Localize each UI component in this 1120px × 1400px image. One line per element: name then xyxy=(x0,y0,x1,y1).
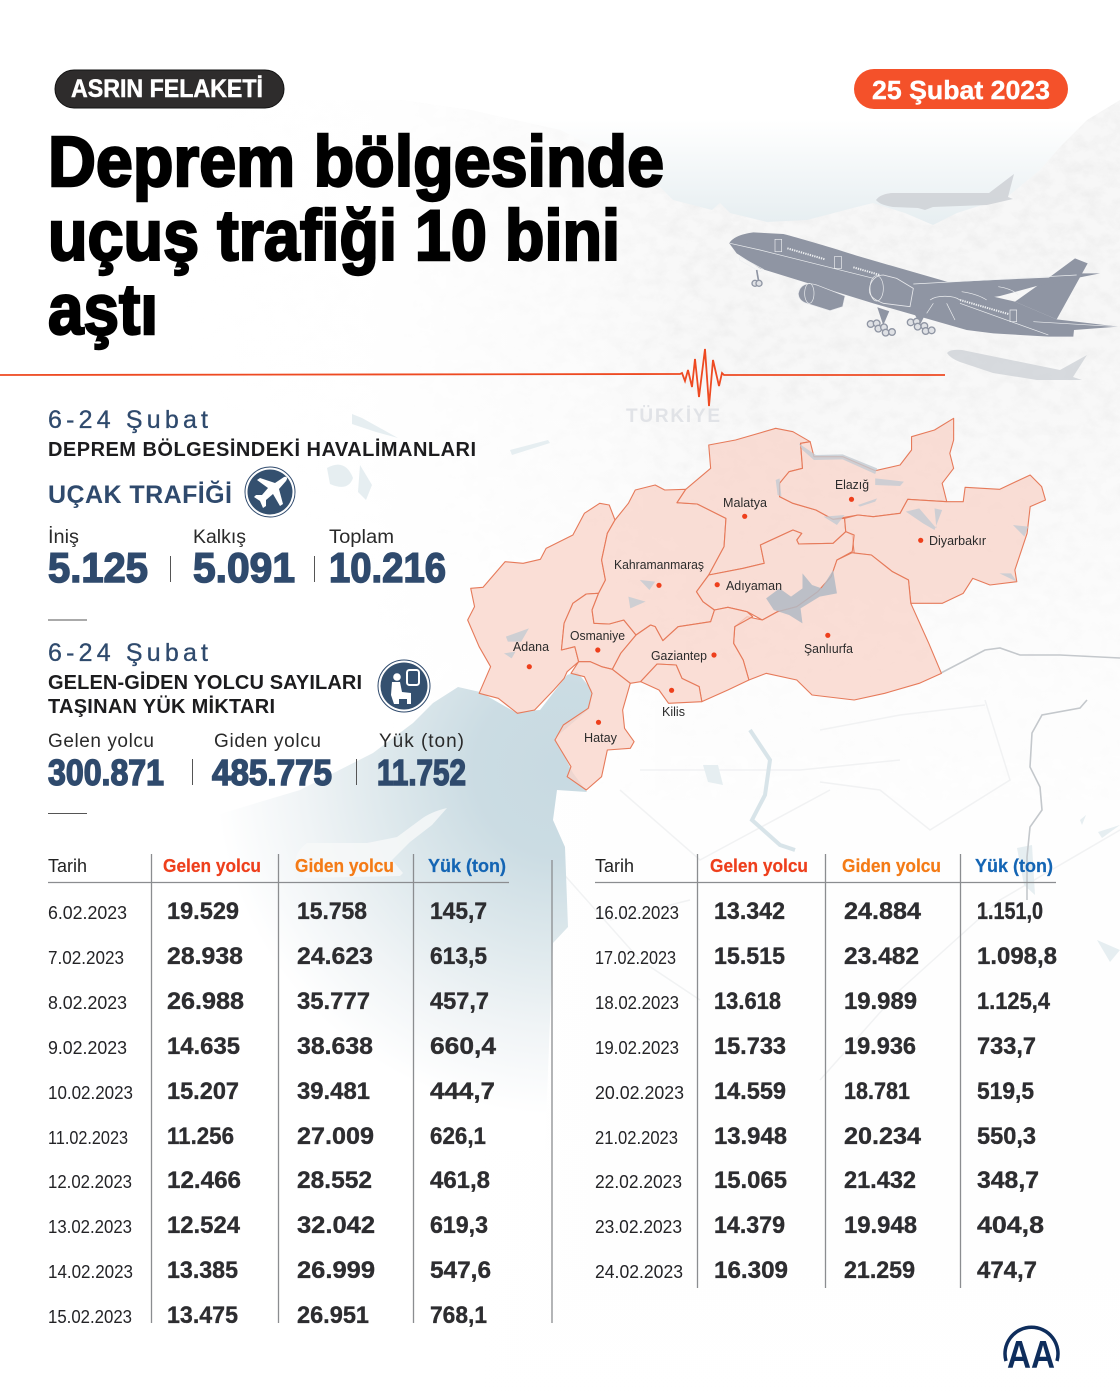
row 20.02.2023: 519,5 xyxy=(977,1078,1034,1105)
heading: aircraft traffic: UÇAK TRAFİĞİ xyxy=(48,480,232,509)
Cyprus xyxy=(295,808,447,878)
row 22.02.2023: 21.432 xyxy=(844,1167,916,1194)
provinces xyxy=(468,418,1045,790)
row 9.02.2023: 9.02.2023 xyxy=(48,1037,127,1058)
Adana: Adana xyxy=(513,639,550,654)
row 19.02.2023: 19.02.2023 xyxy=(595,1037,679,1058)
stat: arriving passengers: Gelen yolcu xyxy=(48,731,154,752)
row 15.02.2023: 13.475 xyxy=(167,1302,238,1329)
row 10.02.2023: 39.481 xyxy=(297,1078,370,1105)
stat: departing passengers xyxy=(212,731,332,793)
row 12.02.2023 xyxy=(48,1167,490,1194)
Kahramanmaras: Kahramanmaraş xyxy=(614,557,704,572)
Elazig: Elazığ xyxy=(835,477,869,492)
row 20.02.2023 xyxy=(595,1078,1034,1105)
row 13.02.2023: 12.524 xyxy=(167,1212,241,1239)
table header xyxy=(595,855,1053,876)
row 22.02.2023: 15.065 xyxy=(714,1167,787,1194)
Sanliurfa xyxy=(804,633,854,656)
Syria and Iraq borders xyxy=(941,648,1120,900)
row 7.02.2023: 28.938 xyxy=(167,943,243,970)
Gaziantep: Gaziantep xyxy=(651,648,707,663)
row 17.02.2023: 15.515 xyxy=(714,943,785,970)
stat: total: Toplam xyxy=(329,527,394,548)
row 21.02.2023: 21.02.2023 xyxy=(595,1127,678,1148)
title: uçuş trafiği 10 bini xyxy=(48,197,620,276)
row 6.02.2023: 6.02.2023 xyxy=(48,902,127,923)
row 8.02.2023: 26.988 xyxy=(167,988,244,1015)
table header: Yük (ton) xyxy=(975,856,1053,876)
subheading: DEPREM BÖLGESİNDEKİ HAVALİMANLARI xyxy=(48,438,476,461)
row 14.02.2023 xyxy=(48,1257,491,1284)
tag: Asrin Felaketi: ASRIN FELAKETİ xyxy=(71,75,263,103)
Kilis xyxy=(662,688,685,719)
row 9.02.2023: 660,4 xyxy=(430,1033,497,1060)
row 21.02.2023 xyxy=(595,1123,1036,1150)
row 14.02.2023: 26.999 xyxy=(297,1257,375,1284)
row 6.02.2023: 15.758 xyxy=(297,898,367,925)
row 16.02.2023: 16.02.2023 xyxy=(595,902,679,923)
row 21.02.2023: 20.234 xyxy=(844,1123,922,1150)
row 23.02.2023: 19.948 xyxy=(844,1212,917,1239)
row 7.02.2023: 24.623 xyxy=(297,943,373,970)
row 18.02.2023: 18.02.2023 xyxy=(595,992,679,1013)
row 11.02.2023: 27.009 xyxy=(297,1123,374,1150)
row 23.02.2023: 404,8 xyxy=(977,1212,1044,1239)
row 13.02.2023 xyxy=(48,1212,488,1239)
country label: TÜRKİYE xyxy=(626,406,720,427)
row 20.02.2023: 14.559 xyxy=(714,1078,786,1105)
row 19.02.2023: 19.936 xyxy=(844,1033,916,1060)
table header: Yük (ton) xyxy=(428,856,506,876)
row 21.02.2023: 13.948 xyxy=(714,1123,787,1150)
row 16.02.2023 xyxy=(595,898,1043,925)
row 17.02.2023: 17.02.2023 xyxy=(595,947,676,968)
row 22.02.2023 xyxy=(595,1167,1039,1194)
stat: departing passengers: Giden yolcu xyxy=(214,731,321,752)
row 17.02.2023: 23.482 xyxy=(844,943,919,970)
row 13.02.2023: 13.02.2023 xyxy=(48,1216,132,1237)
lakes xyxy=(327,414,1120,962)
table: 16-24 February xyxy=(595,854,1057,1288)
Hatay: Hatay xyxy=(584,730,617,745)
row 13.02.2023: 619,3 xyxy=(430,1212,488,1239)
row 22.02.2023: 22.02.2023 xyxy=(595,1171,682,1192)
row 17.02.2023 xyxy=(595,943,1057,970)
stat: arriving passengers: 300.871 xyxy=(48,752,164,793)
logo: Anadolu Agency: AA xyxy=(1007,1334,1055,1377)
row 15.02.2023: 26.951 xyxy=(297,1302,369,1329)
Adiyaman: Adıyaman xyxy=(726,578,782,593)
row 16.02.2023: 13.342 xyxy=(714,898,785,925)
title: aştı xyxy=(48,271,158,350)
row 20.02.2023: 20.02.2023 xyxy=(595,1082,684,1103)
row 10.02.2023 xyxy=(48,1078,495,1105)
Kahramanmaras xyxy=(614,557,704,588)
row 11.02.2023 xyxy=(48,1123,486,1150)
row 24.02.2023: 24.02.2023 xyxy=(595,1261,683,1282)
row 17.02.2023: 1.098,8 xyxy=(977,943,1057,970)
Ataturk dam lake xyxy=(766,570,837,623)
tag: date: 25 Şubat 2023 xyxy=(872,75,1050,105)
Kilis: Kilis xyxy=(662,704,685,719)
row 11.02.2023: 11.256 xyxy=(167,1123,234,1150)
row 18.02.2023: 19.989 xyxy=(844,988,917,1015)
Adana xyxy=(513,639,550,669)
panel: aircraft traffic xyxy=(48,406,476,620)
stat: arriving passengers xyxy=(48,731,164,793)
title xyxy=(48,123,664,350)
Diyarbakir: Diyarbakır xyxy=(929,533,987,548)
earthquake seismograph line xyxy=(0,349,945,406)
stat: landings: İniş xyxy=(48,527,79,548)
row 6.02.2023: 145,7 xyxy=(430,898,487,925)
table header: Giden yolcu xyxy=(842,856,941,876)
row 18.02.2023 xyxy=(595,988,1051,1015)
Osmaniye: Osmaniye xyxy=(570,628,625,643)
table header: Tarih xyxy=(48,855,87,876)
row 15.02.2023: 15.02.2023 xyxy=(48,1306,132,1327)
table header: Gelen yolcu xyxy=(163,856,261,876)
row 10.02.2023: 10.02.2023 xyxy=(48,1082,133,1103)
stat: landings: 5.125 xyxy=(48,544,148,591)
table header xyxy=(48,855,506,876)
row 19.02.2023: 15.733 xyxy=(714,1033,786,1060)
row 12.02.2023: 12.466 xyxy=(167,1167,241,1194)
row 18.02.2023: 1.125,4 xyxy=(977,988,1051,1015)
stat: cargo xyxy=(377,731,466,793)
Osmaniye xyxy=(570,628,625,653)
main airplane xyxy=(729,232,1118,337)
row 13.02.2023: 32.042 xyxy=(297,1212,375,1239)
row 20.02.2023: 18.781 xyxy=(844,1078,910,1105)
row 14.02.2023: 547,6 xyxy=(430,1257,491,1284)
row 8.02.2023 xyxy=(48,988,489,1015)
row 23.02.2023: 23.02.2023 xyxy=(595,1216,682,1237)
title: Deprem bölgesinde xyxy=(48,123,664,202)
row 16.02.2023: 1.151,0 xyxy=(977,898,1043,925)
row 8.02.2023: 8.02.2023 xyxy=(48,992,127,1013)
row 9.02.2023: 38.638 xyxy=(297,1033,373,1060)
subheading: GELEN-GİDEN YOLCU SAYILARI xyxy=(48,671,362,694)
row 10.02.2023: 15.207 xyxy=(167,1078,239,1105)
river xyxy=(750,730,795,850)
reservoirs xyxy=(504,443,1028,658)
stat: departures: 5.091 xyxy=(193,544,295,591)
earthquake zone map xyxy=(468,418,1045,790)
Malatya xyxy=(723,495,768,519)
row 6.02.2023: 19.529 xyxy=(167,898,239,925)
stat: departing passengers: 485.775 xyxy=(212,752,332,793)
stat: cargo: Yük (ton) xyxy=(379,731,464,752)
icon: passenger seat xyxy=(378,660,430,712)
table header: Gelen yolcu xyxy=(710,856,808,876)
row 18.02.2023: 13.618 xyxy=(714,988,781,1015)
background map xyxy=(264,102,1120,1080)
row 11.02.2023: 626,1 xyxy=(430,1123,486,1150)
row 16.02.2023: 24.884 xyxy=(844,898,922,925)
Malatya: Malatya xyxy=(723,495,768,510)
Hatay xyxy=(584,720,617,745)
Mediterranean sea xyxy=(60,672,592,1150)
row 9.02.2023: 14.635 xyxy=(167,1033,240,1060)
row 8.02.2023: 457,7 xyxy=(430,988,489,1015)
period label: 6-24 Şubat xyxy=(48,406,208,434)
tag: Asrin Felaketi xyxy=(55,70,284,108)
subheading: TAŞINAN YÜK MİKTARI xyxy=(48,695,275,718)
stat: total: 10.216 xyxy=(329,544,446,591)
panel: passengers and cargo xyxy=(48,639,466,814)
row 9.02.2023 xyxy=(48,1033,497,1060)
row 11.02.2023: 11.02.2023 xyxy=(48,1127,128,1148)
row 12.02.2023: 461,8 xyxy=(430,1167,490,1194)
row 22.02.2023: 348,7 xyxy=(977,1167,1039,1194)
row 8.02.2023: 35.777 xyxy=(297,988,370,1015)
subheading xyxy=(48,671,362,718)
table header: Giden yolcu xyxy=(295,856,394,876)
row 10.02.2023: 444,7 xyxy=(430,1078,495,1105)
ghost plane top xyxy=(876,174,1014,210)
row 7.02.2023: 613,5 xyxy=(430,943,487,970)
row 21.02.2023: 550,3 xyxy=(977,1123,1036,1150)
row 12.02.2023: 12.02.2023 xyxy=(48,1171,132,1192)
table header: Tarih xyxy=(595,855,634,876)
row 19.02.2023: 733,7 xyxy=(977,1033,1036,1060)
row 12.02.2023: 28.552 xyxy=(297,1167,372,1194)
row 24.02.2023: 21.259 xyxy=(844,1257,915,1284)
row 23.02.2023: 14.379 xyxy=(714,1212,785,1239)
period label: 6-24 Şubat xyxy=(48,639,208,667)
row 14.02.2023: 14.02.2023 xyxy=(48,1261,133,1282)
tag: date xyxy=(854,69,1068,109)
row 15.02.2023 xyxy=(48,1302,487,1329)
row 15.02.2023: 768,1 xyxy=(430,1302,487,1329)
row 6.02.2023 xyxy=(48,898,487,925)
stat: total xyxy=(329,527,446,591)
row 24.02.2023 xyxy=(595,1257,1037,1284)
row 14.02.2023: 13.385 xyxy=(167,1257,238,1284)
table: 6-15 February xyxy=(48,854,552,1329)
row 7.02.2023 xyxy=(48,943,487,970)
stat: cargo: 11.752 xyxy=(377,752,466,793)
Elazig xyxy=(835,477,869,502)
row 24.02.2023: 474,7 xyxy=(977,1257,1037,1284)
stat: departures: Kalkış xyxy=(193,527,246,548)
icon: airplane xyxy=(245,467,295,517)
ghost plane bottom xyxy=(947,350,1087,380)
Sanliurfa: Şanlıurfa xyxy=(804,641,854,656)
row 19.02.2023 xyxy=(595,1033,1036,1060)
row 24.02.2023: 16.309 xyxy=(714,1257,788,1284)
row 23.02.2023 xyxy=(595,1212,1044,1239)
row 7.02.2023: 7.02.2023 xyxy=(48,947,124,968)
